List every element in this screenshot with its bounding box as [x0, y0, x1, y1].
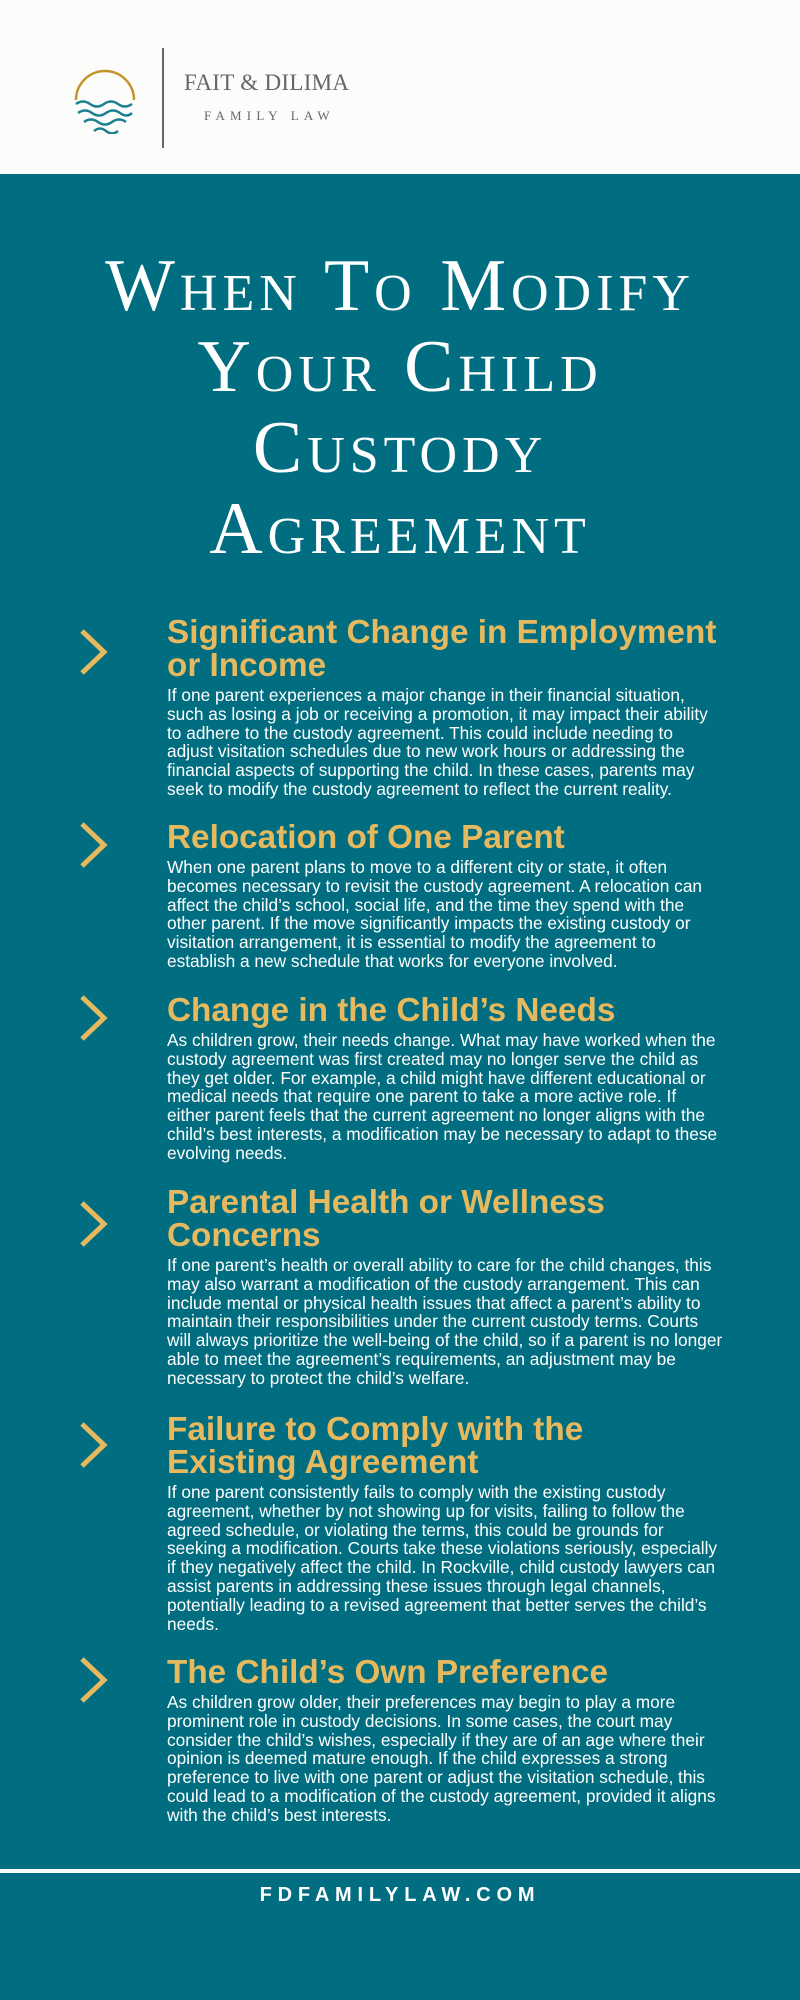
icon: chevron — [80, 822, 108, 868]
section 1 — [80, 614, 716, 799]
section 5: If one parent consistently fails to comply with the existing custody agreement, whether by not showing up for visits, failing to follow the agreed schedule, or violating the terms, this could be grounds for seeking a modification. Courts take these violations seriously, especially if they negatively affect the child. In Rockville, child custody lawyers can assist parents in addressing these issues through legal channels, potentially leading to a revised agreement that better serves the child’s needs. — [167, 1482, 717, 1634]
icon: chevron — [80, 995, 108, 1041]
section 3: As children grow, their needs change. What may have worked when the custody agreement was first created may no longer serve the child as they get older. For example, a child might have different educational or medical needs that require one parent to take a more active role. If either parent feels that the current agreement no longer aligns with the child’s best interests, a modification may be necessary to adapt to these evolving needs. — [167, 1030, 717, 1163]
icon: chevron — [80, 1422, 108, 1468]
icon: chevron — [80, 629, 108, 675]
section 1: If one parent experiences a major change in their financial situation, such as losing a job or receiving a promotion, it may impact their ability to adhere to the custody agreement. This could include needing to adjust visitation schedules due to new work hours or addressing the financial aspects of supporting the child. In these cases, parents may seek to modify the custody agreement to reflect the current reality. — [167, 685, 708, 799]
section 3: Change in the Child’s Needs — [167, 992, 615, 1029]
logo icon — [74, 70, 136, 134]
title: Your Child — [197, 326, 603, 408]
title: Agreement — [209, 488, 591, 570]
section 3 — [80, 992, 717, 1163]
divider line — [162, 48, 164, 148]
section 5 — [80, 1411, 717, 1634]
firm name: FAIT & DILIMA — [184, 70, 349, 95]
section 4 — [80, 1184, 722, 1388]
icon: chevron — [80, 1657, 108, 1703]
section 1: Significant Change in Employment or Income — [167, 614, 716, 684]
section 4: If one parent’s health or overall ability to care for the child changes, this may also warrant a modification of the custody arrangement. This can include mental or physical health issues that affect a parent’s ability to maintain their responsibilities under the current custody terms. Courts will always prioritize the well-being of the child, so if a parent is no longer able to meet the agreement’s requirements, an adjustment may be necessary to protect the child’s welfare. — [167, 1255, 722, 1388]
section 2: When one parent plans to move to a different city or state, it often becomes necessary to revisit the custody agreement. A relocation can affect the child’s school, social life, and the time they spend with the other parent. If the move significantly impacts the existing custody or visitation arrangement, it is essential to modify the agreement to establish a new schedule that works for everyone involved. — [167, 857, 702, 971]
section 6 — [80, 1654, 716, 1825]
footer url: FDFAMILYLAW.COM — [260, 1884, 540, 1906]
section 2 — [80, 819, 702, 971]
section 6: The Child’s Own Preference — [167, 1654, 608, 1691]
header band with logo — [0, 0, 800, 174]
icon: chevron — [80, 1201, 108, 1247]
section 5: Failure to Comply with the Existing Agreement — [167, 1411, 583, 1481]
title: Custody — [253, 407, 547, 489]
title — [105, 245, 695, 570]
firm subtitle: FAMILY LAW — [204, 108, 335, 123]
section 2: Relocation of One Parent — [167, 819, 565, 856]
section 4: Parental Health or Wellness Concerns — [167, 1184, 605, 1254]
section 6: As children grow older, their preferences may begin to play a more prominent role in custody decisions. In some cases, the court may consider the child’s wishes, especially if they are of an age where their opinion is deemed mature enough. If the child expresses a strong preference to live with one parent or adjust the visitation schedule, this could lead to a modification of the custody agreement, provided it aligns with the child’s best interests. — [167, 1692, 716, 1825]
title: When To Modify — [105, 245, 695, 327]
